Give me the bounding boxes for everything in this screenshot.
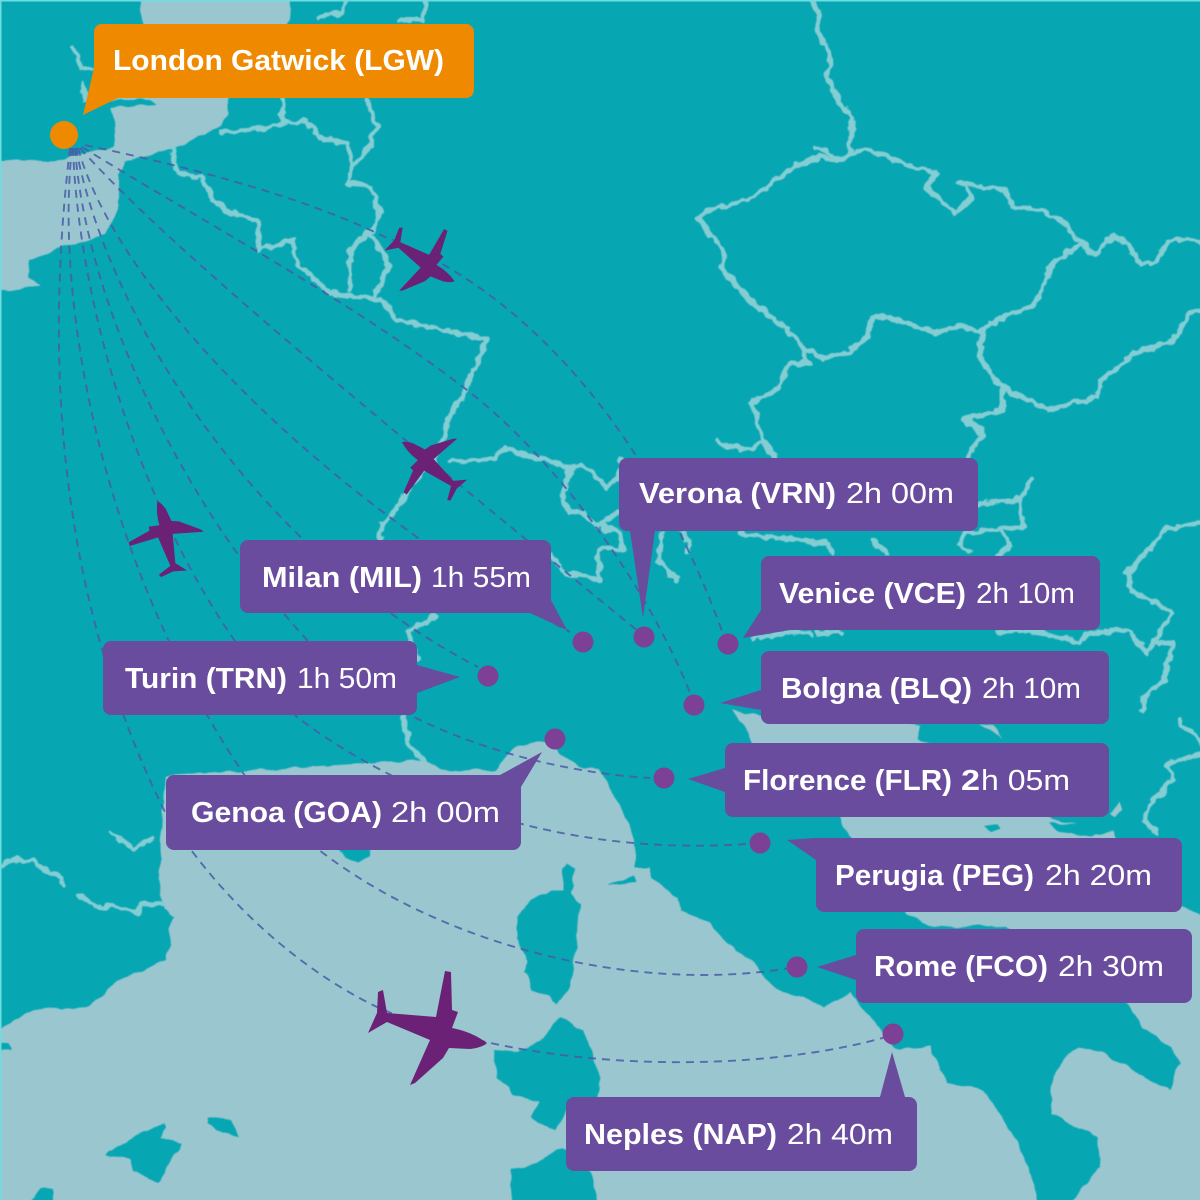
- callout: Rome: Rome (FCO): [874, 951, 1048, 983]
- destination dot: Rome: [786, 956, 808, 978]
- destination dot: Perugia: [750, 832, 770, 854]
- callout: Naples: [566, 1052, 917, 1171]
- island: Sicily: [510, 1147, 597, 1200]
- icon: plane over France: [117, 489, 216, 589]
- callout: Genoa: [166, 752, 542, 850]
- callout: Venice: [743, 556, 1100, 638]
- island: Elba: [607, 875, 635, 885]
- destination dot: Florence: [654, 768, 674, 788]
- island: Sardinia: [495, 1018, 600, 1132]
- destination dot: Venice: [718, 634, 738, 654]
- callout: Verona: [619, 458, 978, 618]
- icon: plane near Switzerland: [383, 418, 481, 515]
- callout: Bologna: [720, 651, 1109, 724]
- icon: plane large: [368, 971, 487, 1085]
- callout: Venice: 2h 10m: [976, 578, 1075, 610]
- route to Perugia: [73, 148, 760, 846]
- callout: London Gatwick: [83, 24, 474, 115]
- callout: Milan: Milan (MIL): [262, 562, 422, 594]
- coast blob beneath the Genoa label: [337, 848, 372, 863]
- country borders: [0, 0, 1200, 913]
- route to Bologna: [82, 147, 693, 700]
- callout: Genoa: 2h 00m: [391, 797, 500, 829]
- callout: Rome: [817, 929, 1192, 1003]
- sea: Adriatic: [733, 710, 1200, 1200]
- callout: Rome: 2h 30m: [1058, 951, 1164, 983]
- light sea fragments by the Croatian coast: [980, 725, 1122, 818]
- route to Florence: [75, 148, 650, 778]
- callout: Perugia: Perugia (PEG): [835, 860, 1034, 892]
- flight route lines: [59, 145, 893, 1062]
- destination dot: Milan: [572, 632, 594, 652]
- callout: Florence: 2: [961, 765, 980, 797]
- route to Rome: [69, 148, 790, 975]
- callout: Turin: 1h 50m: [297, 663, 397, 695]
- route to Milan: [78, 148, 570, 632]
- callout: Naples: 2h 40m: [787, 1119, 893, 1151]
- callout: Florence: h 05m: [981, 765, 1070, 797]
- destination dot: Naples: [882, 1024, 904, 1044]
- callout: Genoa: Genoa (GOA): [191, 797, 382, 829]
- route to Turin: [76, 148, 478, 667]
- route to Naples: [59, 148, 893, 1062]
- callout: Bologna: Bolgna (BLQ): [781, 673, 972, 705]
- origin dot: London Gatwick: [50, 121, 78, 149]
- Adriatic islands: [985, 822, 1112, 836]
- route to Verona: [80, 148, 645, 637]
- destination dot: Turin: [478, 666, 498, 686]
- callout: Turin: [103, 641, 460, 715]
- route to Venice: [85, 145, 726, 642]
- destination dot: Genoa: [544, 728, 566, 750]
- sea: Mediterranean: [0, 742, 1040, 1200]
- callout: Turin: Turin (TRN): [125, 663, 287, 695]
- callout: Milan: [240, 540, 567, 630]
- island: small Spanish coast islet: [0, 1040, 12, 1052]
- island: Mallorca: [108, 1123, 182, 1182]
- callout: Florence: [688, 743, 1109, 817]
- callout: Bologna: 2h 10m: [982, 673, 1081, 705]
- callout: Verona: 2h 00m: [846, 478, 954, 510]
- island: Corsica: [517, 863, 580, 1005]
- icon: plane near Luxembourg: [374, 213, 470, 307]
- island: Ibiza: [28, 1188, 53, 1200]
- callout: Naples: Neples (NAP): [584, 1119, 777, 1151]
- destination dot: Verona: [634, 626, 654, 648]
- callout: Perugia: [787, 838, 1182, 912]
- callout: London Gatwick: London Gatwick (LGW): [113, 45, 444, 77]
- callout: Florence: Florence (FLR): [743, 765, 952, 797]
- callout: Venice: Venice (VCE): [779, 578, 966, 610]
- callout: Perugia: 2h 20m: [1045, 860, 1152, 892]
- island: Menorca: [206, 1117, 240, 1138]
- callout: Verona: Verona (VRN): [639, 478, 836, 510]
- callout: Milan: 1h 55m: [431, 562, 531, 594]
- sea: English Channel and North Sea: [0, 0, 292, 292]
- destination dot: Bologna: [684, 694, 704, 716]
